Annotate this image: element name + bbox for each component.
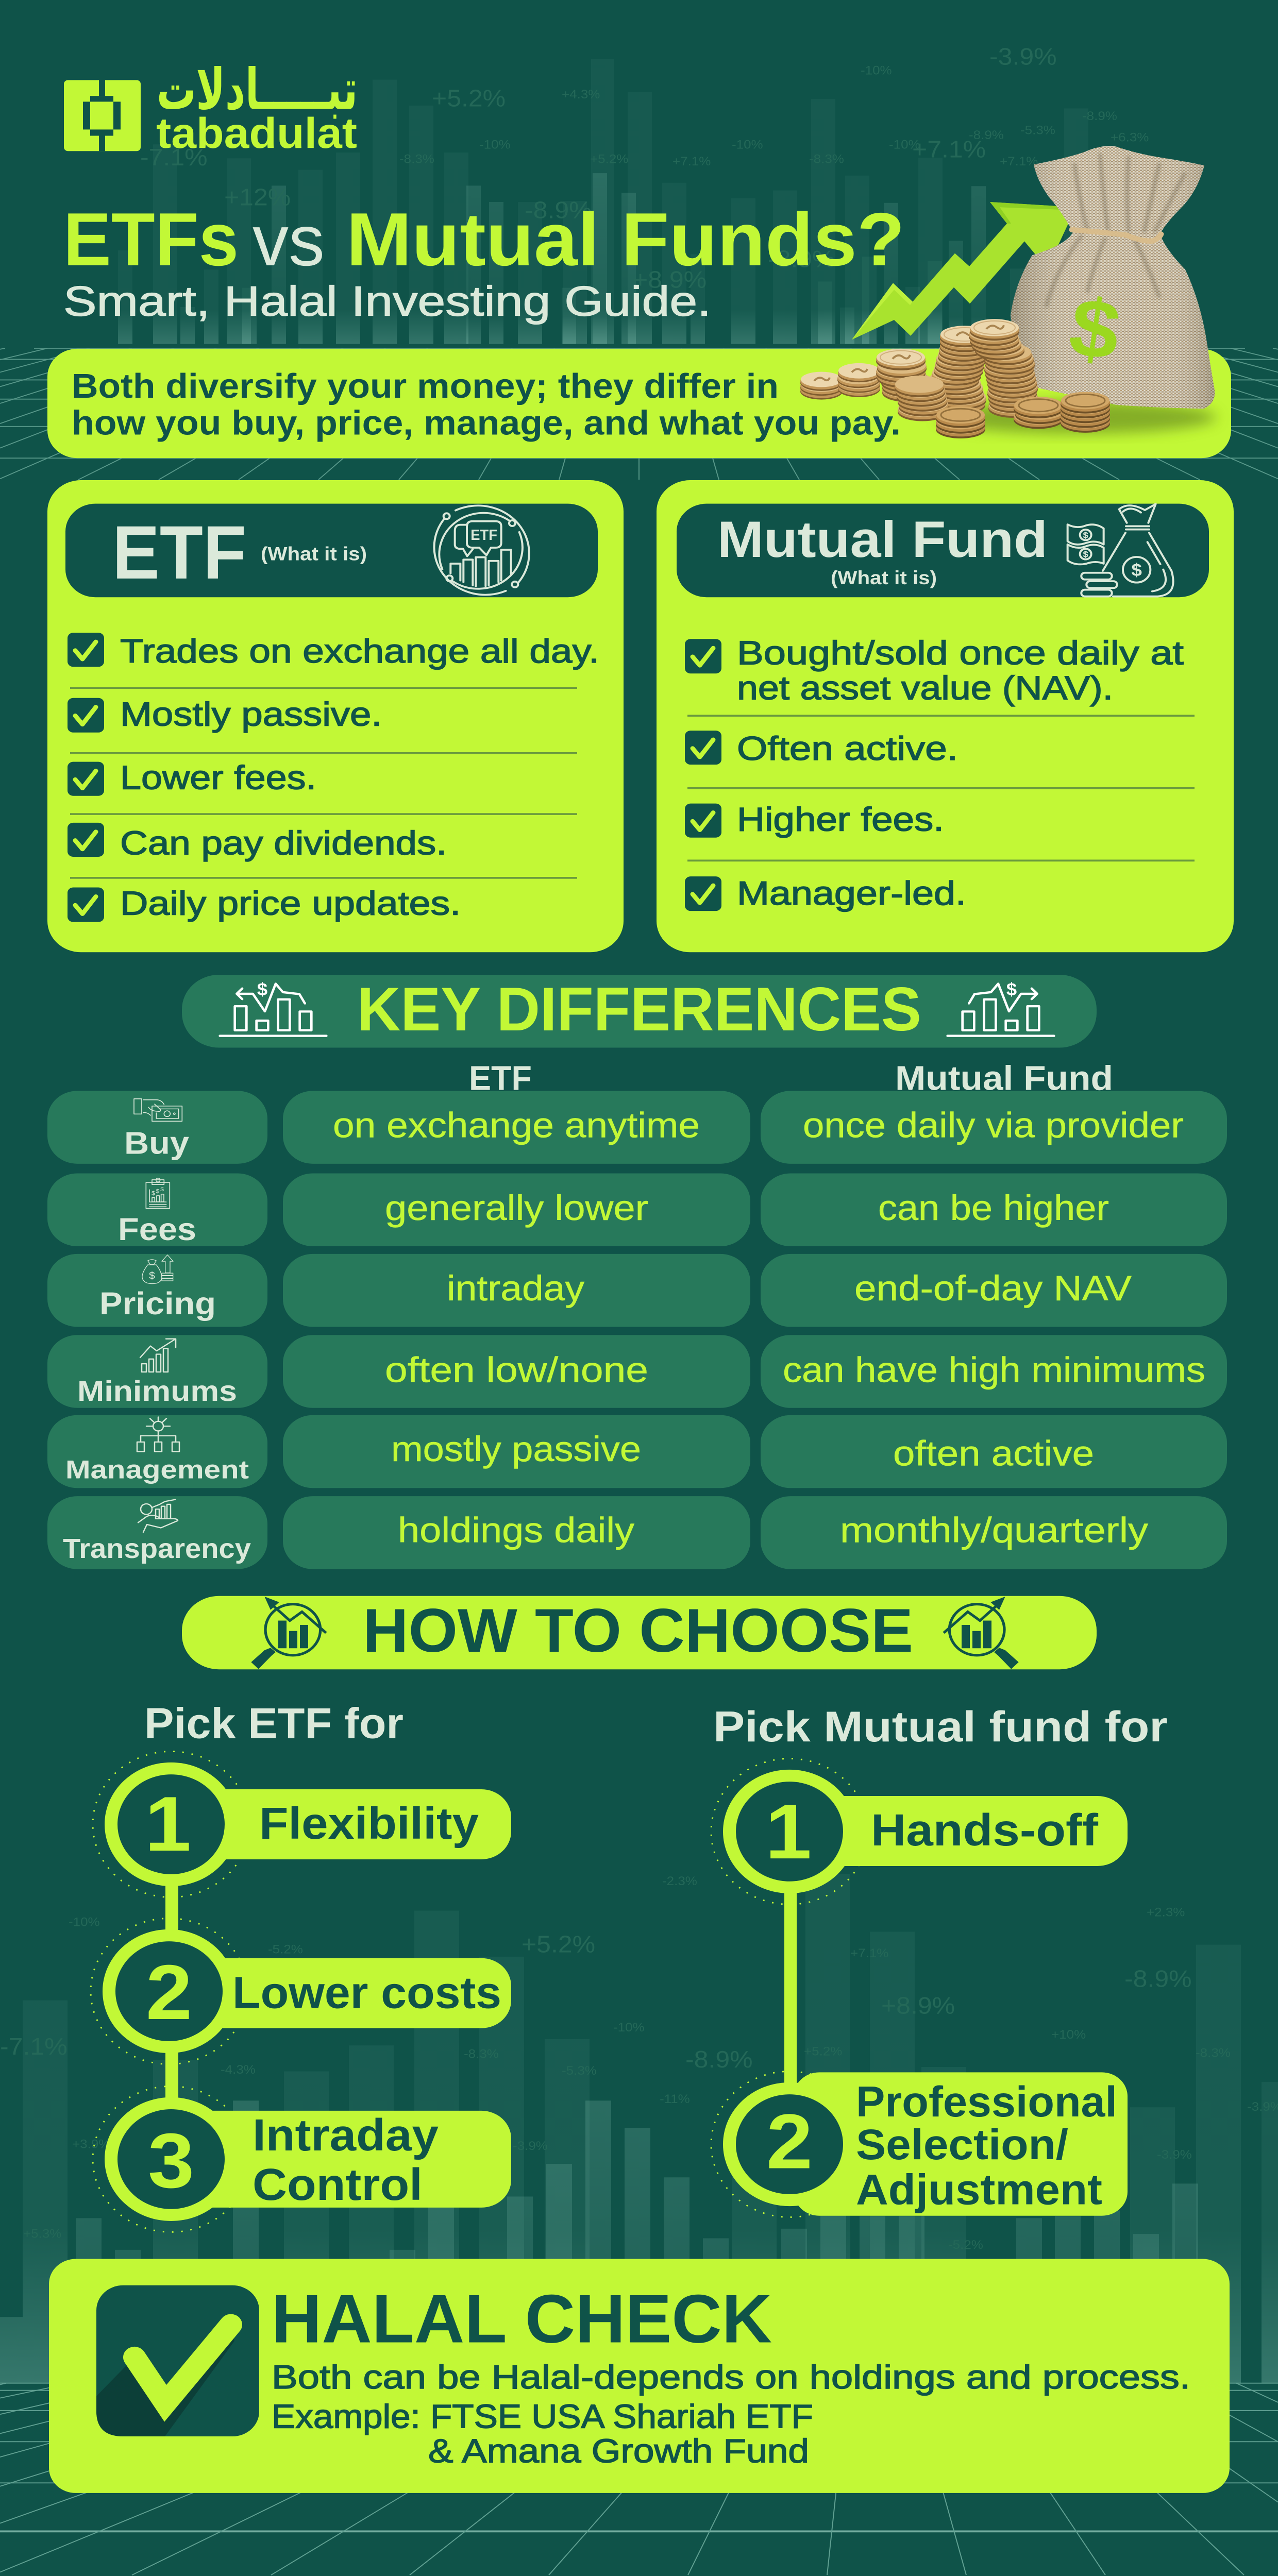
logo latin wordmark: tabadulat	[156, 109, 357, 157]
icon: hand with money	[134, 1099, 182, 1121]
step 2	[91, 1918, 511, 2064]
row: Fees: generally lower	[385, 1188, 648, 1228]
body text: Example: FTSE USA Shariah ETF	[272, 2398, 813, 2435]
row: Transparency	[47, 1496, 1227, 1569]
bag dollar sign: $	[1064, 281, 1126, 378]
icon: money bag and arrow	[142, 1255, 173, 1284]
panel: Halal check	[49, 2259, 1230, 2493]
background: top bar chart: +12%	[224, 184, 291, 211]
background: bottom bar chart: +8.9%	[881, 1992, 955, 2019]
Mutual Fund list: Often active.	[737, 730, 958, 767]
comparison table	[47, 1091, 1227, 1569]
step 2: Professional	[856, 2078, 1117, 2126]
step 3	[93, 2086, 511, 2232]
background: top bar chart: -8.9%	[525, 197, 592, 224]
background: top bar chart: -10%	[732, 138, 763, 151]
icon: chart left	[220, 979, 326, 1036]
background: bottom bar chart: +2.3%	[1147, 1906, 1185, 1920]
Mutual Fund header: Mutual Fund	[717, 510, 1048, 568]
background: top bar chart	[118, 43, 1167, 344]
step 3: Intraday	[253, 2110, 439, 2160]
background: top bar chart: -8.3%	[399, 152, 434, 166]
row: Pricing	[47, 1254, 1227, 1327]
background: bottom bar chart: +5.2%	[804, 2045, 842, 2059]
row: Fees: Fees	[118, 1211, 196, 1247]
background: bottom bar chart: -7.1%	[0, 2033, 68, 2060]
intro text: how you buy, price, manage, and what you pay.	[72, 403, 901, 442]
ETF list: Trades on exchange all day.	[120, 633, 599, 670]
row: Fees	[47, 1173, 1227, 1247]
icon: clipboard chart: $	[160, 1187, 164, 1193]
row: Minimums: can have high minimums	[783, 1350, 1205, 1390]
background: bottom bar chart: -5.2%	[948, 2238, 983, 2252]
background: top bar chart: +6.3%	[1111, 130, 1149, 144]
body text: & Amana Growth Fund	[428, 2433, 809, 2470]
intro text	[72, 366, 901, 442]
icon: money bag with notes and coins	[1068, 504, 1173, 597]
background: top bar chart: -5.3%	[1020, 124, 1055, 137]
body text	[272, 2359, 1190, 2470]
background: top bar chart: +5.2%	[590, 152, 628, 166]
ETF list	[68, 633, 599, 922]
icon: magnifier left	[251, 1597, 326, 1669]
heading: How to choose: HOW TO CHOOSE	[363, 1596, 913, 1665]
background: top bar chart: -3.9%	[989, 43, 1057, 70]
column heading: Pick ETF for	[144, 1699, 403, 1748]
icon: money bag with notes and coins: $	[1083, 530, 1088, 540]
body text: Both can be Halal-depends on holdings and process.	[272, 2359, 1190, 2396]
heading: Key Differences	[182, 975, 1097, 1048]
logo arabic wordmark: تبـــــادلات	[157, 56, 358, 122]
background: top bar chart: -10%	[861, 63, 892, 77]
background: bottom bar chart: +7.1%	[850, 1946, 888, 1960]
row: Pricing: end-of-day NAV	[854, 1269, 1132, 1309]
ETF list: Daily price updates.	[120, 885, 461, 922]
step 2: Lower costs	[232, 1968, 501, 2018]
title: vs	[253, 200, 325, 281]
background: bottom bar chart: +5.2%	[522, 1931, 595, 1958]
Mutual Fund list: Bought/sold once daily at	[737, 635, 1184, 672]
step 3: 3	[148, 2117, 194, 2205]
illustration: money bag, arrow and coins	[800, 146, 1216, 438]
step 1: Flexibility	[259, 1799, 479, 1849]
background: top perspective grid	[0, 348, 1278, 480]
Mutual Fund list: Manager-led.	[737, 875, 966, 912]
panel: Mutual Fund	[657, 480, 1234, 952]
icon: magnifier right	[944, 1597, 1019, 1669]
step 1	[93, 1751, 511, 1897]
background: bottom bar chart: -3.9%	[513, 2139, 548, 2153]
icon: money bag with notes and coins: $	[1083, 549, 1088, 559]
logo	[64, 56, 358, 157]
row: Transparency: monthly/quarterly	[840, 1511, 1148, 1550]
row: Transparency: Transparency	[63, 1533, 251, 1564]
row: Management	[47, 1415, 1227, 1488]
icon: hand holding chart	[138, 1500, 178, 1532]
Mutual Fund list: net asset value (NAV).	[737, 670, 1113, 707]
step 2: Selection/	[856, 2121, 1068, 2168]
icon: chart left: $	[257, 979, 267, 999]
row: Minimums	[47, 1335, 1227, 1408]
icon: clipboard chart	[146, 1178, 170, 1208]
heading: HALAL CHECK	[272, 2281, 772, 2357]
rope	[1072, 230, 1161, 241]
Mutual Fund header: (What it is)	[831, 567, 937, 589]
icon: chart right	[948, 979, 1054, 1036]
coin stacks	[800, 319, 1110, 438]
step 1	[711, 1758, 1128, 1904]
row: Pricing: Pricing	[99, 1285, 216, 1321]
background: bottom bar chart: -5.3%	[562, 2064, 597, 2078]
step 1: 1	[145, 1781, 191, 1868]
column: Pick Mutual fund for	[711, 1703, 1168, 2217]
background: top bar chart: +7.1%	[672, 155, 711, 168]
row: Buy: Buy	[124, 1125, 190, 1161]
background: bottom bar chart: -10%	[613, 2021, 645, 2035]
background: bottom bar chart: -10%	[69, 1915, 100, 1929]
background: bottom bar chart: +5.3%	[23, 2227, 61, 2241]
row: Management: mostly passive	[391, 1429, 641, 1469]
background: bottom bar chart: -8.3%	[464, 2047, 499, 2061]
heading: Key Differences: KEY DIFFERENCES	[357, 975, 921, 1044]
heading: How to choose	[182, 1596, 1097, 1669]
background: bottom bar chart: -2.3%	[662, 1874, 697, 1888]
connector line	[165, 1871, 178, 2120]
background: bottom bar chart: +10%	[1051, 2028, 1086, 2042]
background: bottom bar chart: -3.9%	[1157, 2148, 1192, 2162]
background: bottom perspective grid	[0, 2383, 1278, 2575]
logo mark	[64, 80, 141, 151]
ETF header	[65, 504, 598, 597]
ETF list: Mostly passive.	[120, 696, 382, 733]
background: bottom bar chart: -8.3%	[1196, 2046, 1231, 2060]
row: Minimums: often low/none	[385, 1350, 648, 1390]
background: top bar chart: -10%	[889, 138, 920, 151]
connector line	[784, 1880, 797, 2096]
icon: rising bars	[140, 1339, 176, 1372]
title: Mutual Funds?	[346, 198, 905, 282]
background: top bar chart: +5.2%	[432, 85, 506, 112]
step 2: 2	[146, 1949, 192, 2036]
growth arrow	[852, 202, 1076, 340]
icon: money bag with notes and coins: $	[1131, 560, 1142, 580]
icon: org chart	[137, 1417, 179, 1452]
Mutual Fund list	[685, 635, 1195, 912]
icon: money bag and arrow: $	[149, 1270, 155, 1281]
step 2: 2	[766, 2098, 813, 2185]
title: ETFs	[63, 198, 239, 282]
icon: clipboard chart: $	[156, 1189, 160, 1194]
icon: chart right: $	[1006, 979, 1017, 999]
table column headers: ETF	[469, 1059, 532, 1097]
row: Transparency: holdings daily	[398, 1511, 634, 1550]
background: top bar chart: -8.9%	[768, 246, 835, 273]
intro text: Both diversify your money; they differ in	[72, 366, 779, 405]
icon: ETF chart badge	[434, 505, 529, 595]
ETF list: Lower fees.	[120, 759, 316, 796]
background: top bar chart: +7.1%	[1000, 155, 1038, 168]
title	[63, 198, 905, 282]
subtitle: Smart, Halal Investing Guide.	[63, 278, 711, 325]
background: bottom bar chart	[0, 1874, 1278, 2383]
background: top bar chart: -8.3%	[809, 152, 844, 166]
background: bottom bar chart: -5.2%	[268, 1942, 303, 1956]
background: top bar chart: +4.3%	[562, 88, 600, 101]
money bag	[1011, 146, 1215, 409]
ETF header: (What it is)	[261, 544, 367, 565]
background: top bar chart: -8.9%	[1082, 109, 1117, 123]
Mutual Fund header	[677, 504, 1209, 597]
step 3: Control	[253, 2160, 423, 2210]
icon: ETF chart badge: ETF	[470, 527, 497, 544]
row: Buy	[47, 1091, 1227, 1164]
background: bottom bar chart: -4.3%	[221, 2063, 256, 2077]
background: bottom bar chart: +3.9%	[72, 2137, 110, 2151]
background: top bar chart: +8.9%	[633, 266, 707, 293]
background: top bar chart: -8.9%	[969, 128, 1004, 142]
column: Pick ETF for	[91, 1699, 511, 2232]
background: top bar chart: +7.1%	[912, 136, 986, 163]
row: Management: often active	[893, 1434, 1094, 1473]
row: Fees: can be higher	[878, 1188, 1109, 1228]
intro panel	[47, 349, 1231, 458]
row: Management: Management	[65, 1455, 249, 1484]
background: bottom bar chart: -8.9%	[1124, 1965, 1192, 1992]
ground shadow	[938, 401, 1216, 434]
background: bottom bar chart: -11%	[660, 2092, 690, 2106]
table column headers: Mutual Fund	[895, 1059, 1113, 1097]
step 2: Adjustment	[856, 2165, 1102, 2214]
row: Buy: once daily via provider	[803, 1106, 1184, 1145]
ETF list: Can pay dividends.	[120, 824, 447, 862]
ETF header: ETF	[112, 511, 246, 595]
row: Minimums: Minimums	[77, 1376, 237, 1407]
background: top bar chart: +12%	[1100, 156, 1167, 183]
background: top bar chart: -7.1%	[140, 144, 208, 171]
background: bottom bar chart: -8.9%	[685, 2046, 753, 2073]
column heading: Pick Mutual fund for	[713, 1703, 1168, 1751]
row: Buy: on exchange anytime	[333, 1106, 700, 1145]
icon: check mark	[96, 2285, 259, 2436]
background: top bar chart: -10%	[479, 138, 511, 151]
row: Pricing: intraday	[447, 1269, 584, 1309]
icon: clipboard chart: $	[152, 1191, 155, 1197]
step 1: 1	[765, 1788, 812, 1875]
step 1: Hands-off	[871, 1805, 1099, 1855]
step 2	[711, 2071, 1128, 2217]
Mutual Fund list: Higher fees.	[737, 801, 944, 838]
table column headers	[469, 1059, 1113, 1097]
panel: ETF	[47, 480, 624, 952]
